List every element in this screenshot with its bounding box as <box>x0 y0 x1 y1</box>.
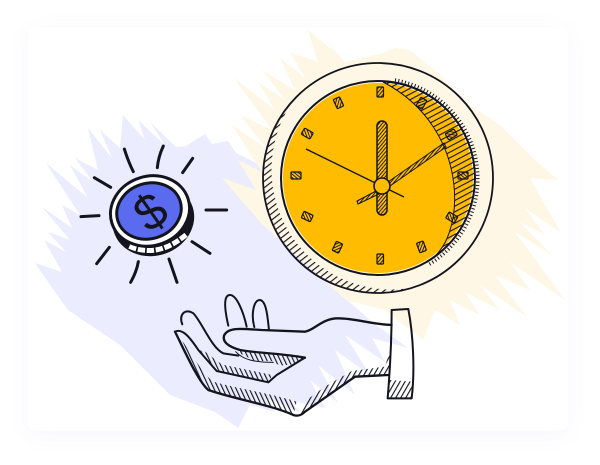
back fingers <box>225 295 269 330</box>
card background <box>28 27 568 431</box>
coin with rays <box>81 146 227 282</box>
second hand <box>306 149 404 197</box>
thumb underside line <box>236 352 273 362</box>
hour markers <box>291 87 468 264</box>
shaded crescent <box>383 82 475 261</box>
dollar sign: $ <box>123 181 178 243</box>
clock <box>263 63 493 293</box>
hand <box>175 295 413 416</box>
cream brush wash <box>222 30 565 340</box>
rays <box>81 146 227 282</box>
coin front <box>101 166 199 256</box>
rim hatching <box>263 101 416 293</box>
lavender brush wash <box>35 115 408 428</box>
coin edge <box>103 173 204 267</box>
clock face <box>283 83 473 273</box>
inner rim <box>281 81 475 275</box>
fuzzy rim ticks <box>395 80 478 265</box>
minute hand <box>357 143 446 204</box>
finger hatching <box>198 350 272 382</box>
clock outer rim <box>263 63 493 293</box>
thumb and upper hand <box>224 318 392 358</box>
thumb underside hatching <box>240 350 305 366</box>
palm underside <box>175 332 388 416</box>
cuff <box>388 309 413 398</box>
index finger <box>181 311 238 356</box>
palm hatching, right <box>300 347 391 414</box>
coin reeding <box>129 234 187 251</box>
palm hatching, left <box>176 332 297 415</box>
hub <box>374 178 390 194</box>
middle finger <box>175 331 305 382</box>
hour hand <box>377 121 387 215</box>
coin blue centre <box>109 175 189 247</box>
